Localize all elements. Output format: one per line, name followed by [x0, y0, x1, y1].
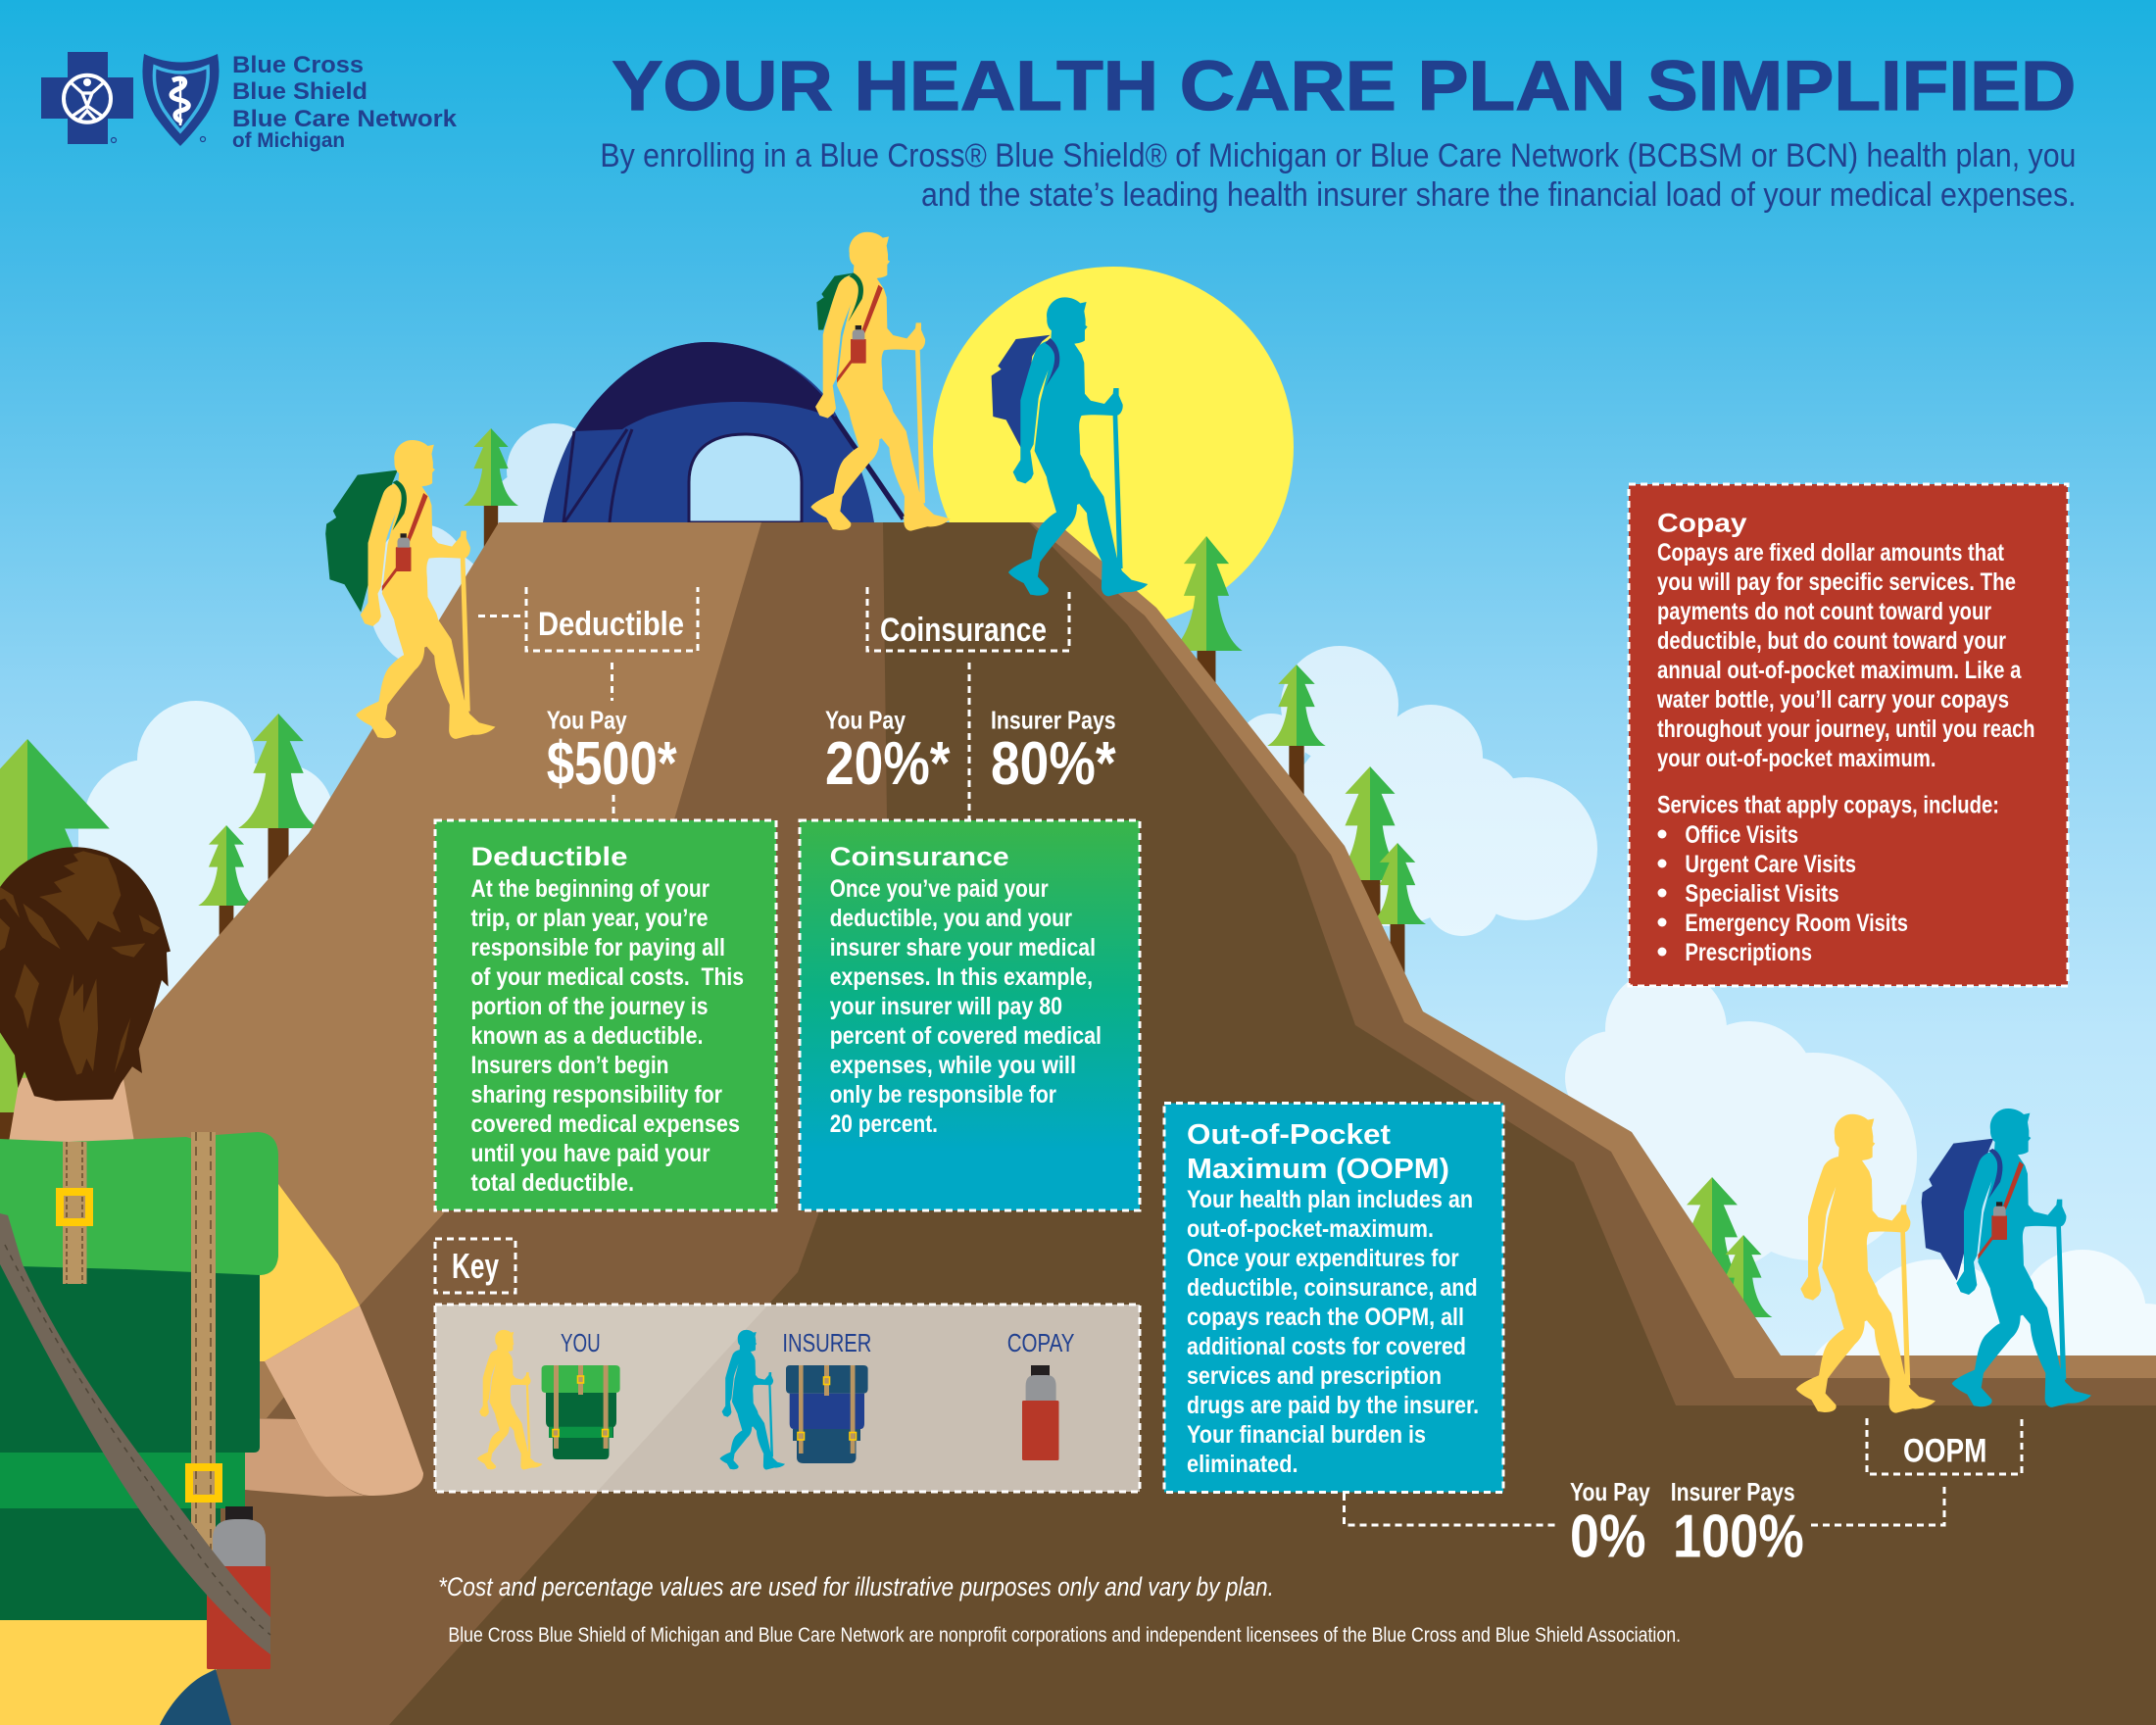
mountain: [0, 522, 2156, 1725]
text block: deductible: until you have paid your: [470, 1140, 710, 1167]
pack lower body: [0, 1508, 220, 1620]
text block: coinsurance: expenses, while you will: [830, 1052, 1076, 1079]
shoulder strap: [0, 1213, 270, 1654]
text block: coinsurance: insurer share your medical: [830, 934, 1096, 961]
coinsurance insurer pays: 80%*: [991, 730, 1116, 798]
coinsurance insurer pays: Insurer Pays: [991, 706, 1116, 735]
text block: copay: Copays are fixed dollar amounts that: [1657, 539, 2005, 567]
logo: [41, 52, 458, 152]
key: you: YOU: [561, 1328, 601, 1357]
jeans: [160, 1669, 231, 1725]
foreground hiker seen from behind: [0, 847, 423, 1725]
hiker: you, on the slope with full pack: [325, 440, 495, 739]
clouds lower right: [1565, 968, 1917, 1274]
text block: deductible: portion of the journey is: [470, 993, 708, 1020]
clouds behind the summit: [370, 423, 601, 668]
oopm insurer pays: [1671, 1477, 1804, 1571]
pack lid: [0, 1132, 278, 1275]
text block: coinsurance: only be responsible for: [830, 1081, 1056, 1109]
logo cross: [41, 52, 133, 144]
list: copay services: [1658, 821, 1908, 966]
text block: oopm: services and prescription: [1187, 1362, 1442, 1390]
pack green band: [0, 1453, 245, 1508]
hiker: you, on the summit: [810, 232, 951, 531]
heading: copay: Copay: [1657, 509, 1747, 538]
text block: oopm: Your financial burden is: [1187, 1421, 1426, 1449]
deductible label: [478, 587, 698, 819]
text block: copay: [1656, 539, 2034, 818]
key: insurer: INSURER: [782, 1328, 871, 1357]
text block: deductible: trip, or plan year, you’re: [470, 905, 709, 932]
coinsurance label: Coinsurance: [880, 612, 1047, 649]
key: copay: [1007, 1328, 1074, 1460]
text block: oopm: Once your expenditures for: [1187, 1245, 1459, 1272]
text block: coinsurance: percent of covered medical: [830, 1022, 1102, 1050]
coinsurance you pay: [825, 706, 951, 798]
key heading: Key: [452, 1246, 499, 1286]
coinsurance you pay: 20%*: [825, 730, 951, 798]
key: copay: COPAY: [1007, 1328, 1074, 1357]
text block: coinsurance: Once you’ve paid your: [830, 875, 1049, 903]
deductible label: Deductible: [538, 606, 684, 643]
list: copay services: Specialist Visits: [1685, 880, 1839, 908]
oopm you pay: You Pay: [1570, 1477, 1650, 1506]
text block: oopm: Your health plan includes an: [1187, 1186, 1473, 1213]
text block: coinsurance: deductible, you and your: [830, 905, 1072, 932]
deductible amount: $500*: [547, 730, 677, 798]
oopm you pay: [1570, 1477, 1650, 1571]
deductible amount: You Pay: [547, 706, 627, 735]
shirt hem: [0, 1620, 220, 1725]
text block: oopm: additional costs for covered: [1187, 1333, 1466, 1360]
text block: copay: payments do not count toward your: [1657, 598, 1991, 625]
text block: copay: Services that apply copays, include:: [1657, 791, 1999, 818]
list: copay services: Office Visits: [1685, 821, 1798, 849]
text block: deductible: known as a deductible.: [470, 1022, 704, 1050]
text block: coinsurance: expenses. In this example,: [830, 963, 1093, 991]
text block: deductible: responsible for paying all: [470, 934, 725, 961]
text block: oopm: copays reach the OOPM, all: [1187, 1304, 1464, 1331]
key background: [435, 1305, 1140, 1492]
heading: oopm: Out-of-Pocket: [1187, 1119, 1391, 1151]
text block: copay: water bottle, you’ll carry your copays: [1656, 686, 2009, 714]
title: YOUR HEALTH CARE PLAN SIMPLIFIED: [612, 48, 2076, 125]
neck: [9, 1073, 134, 1142]
long strap: [191, 1132, 216, 1573]
hiker: insurer, on the summit: [992, 297, 1148, 596]
sun: [933, 267, 1294, 627]
oopm label: OOPM: [1903, 1433, 1986, 1470]
key: insurer: [719, 1328, 871, 1470]
deductible amount: [547, 706, 677, 798]
pack body: [0, 1264, 260, 1453]
trees: [0, 428, 1772, 1523]
text block: copay: deductible, but do count toward your: [1657, 627, 2006, 655]
logo wordmark: Blue Care Network: [232, 106, 458, 132]
text block: deductible: [470, 875, 744, 1197]
small strap: [63, 1142, 86, 1284]
list: copay services: Emergency Room Visits: [1685, 910, 1908, 937]
text block: coinsurance: 20 percent.: [830, 1110, 938, 1138]
logo wordmark: [232, 52, 458, 152]
footnote: *Cost and percentage values are used for illustrative purposes only and vary by plan.: [438, 1572, 1274, 1602]
oopm insurer pays: 100%: [1673, 1503, 1804, 1571]
heading: oopm: Maximum (OOPM): [1187, 1154, 1449, 1185]
tent: [543, 342, 904, 522]
forearm: [245, 1418, 369, 1497]
text block: oopm: deductible, coinsurance, and: [1187, 1274, 1478, 1302]
buckle lower: [189, 1467, 219, 1499]
heading: oopm: [1187, 1119, 1449, 1185]
logo wordmark: of Michigan: [232, 129, 345, 152]
panel: out-of-pocket maximum: [1164, 1104, 1503, 1492]
heading: deductible: Deductible: [470, 842, 627, 871]
key heading: [435, 1239, 515, 1293]
text block: deductible: covered medical expenses: [470, 1110, 740, 1138]
clouds at horizon: [1803, 1250, 2156, 1455]
coinsurance insurer pays: [991, 706, 1116, 798]
text block: coinsurance: [830, 875, 1102, 1138]
panel: copay: [1629, 484, 2068, 986]
list: copay services: Prescriptions: [1685, 939, 1812, 966]
oopm insurer pays: Insurer Pays: [1671, 1477, 1795, 1506]
disclaimer: Blue Cross Blue Shield of Michigan and Blue Care Network are nonprofit corporations and independent licensees of the Blue Cross and Blue Shield Association.: [448, 1624, 1681, 1647]
text block: coinsurance: your insurer will pay 80: [830, 993, 1062, 1020]
clouds right of mountain: [1237, 646, 1597, 936]
hiker: you, at the end of the trail: [1796, 1114, 1936, 1413]
hair: [0, 847, 171, 1101]
text block: oopm: eliminated.: [1187, 1451, 1298, 1478]
panel: coinsurance: [800, 820, 1140, 1210]
text block: copay: your out-of-pocket maximum.: [1657, 745, 1936, 772]
panel: key: [435, 1239, 1140, 1492]
bottle: [207, 1506, 270, 1669]
clouds left: [78, 701, 333, 1127]
text block: copay: annual out-of-pocket maximum. Like a: [1657, 657, 2022, 684]
text block: oopm: [1187, 1186, 1479, 1478]
oopm you pay: 0%: [1570, 1503, 1646, 1571]
key: you: [477, 1328, 620, 1470]
text block: oopm: out-of-pocket-maximum.: [1187, 1215, 1434, 1243]
text block: deductible: At the beginning of your: [470, 875, 710, 903]
logo wordmark: Blue Cross: [232, 52, 364, 78]
upper arm: [265, 1306, 423, 1496]
text block: oopm: drugs are paid by the insurer.: [1187, 1392, 1479, 1419]
text block: deductible: total deductible.: [470, 1169, 634, 1197]
text block: copay: you will pay for specific services. The: [1657, 568, 2016, 596]
heading: coinsurance: Coinsurance: [830, 842, 1009, 871]
shirt sleeve: [260, 1176, 360, 1361]
text block: deductible: of your medical costs. This: [470, 963, 744, 991]
text block: copay: throughout your journey, until you reach: [1657, 715, 2034, 743]
list: copay services: Urgent Care Visits: [1685, 851, 1856, 878]
coinsurance label: [867, 587, 1069, 819]
panel: deductible: [435, 820, 776, 1210]
intro text: [600, 137, 2077, 214]
text block: deductible: Insurers don’t begin: [470, 1052, 668, 1079]
buckle upper: [60, 1192, 89, 1222]
logo shield: [142, 54, 220, 146]
coinsurance you pay: You Pay: [825, 706, 906, 735]
text block: deductible: sharing responsibility for: [470, 1081, 722, 1109]
oopm label: [1345, 1418, 2022, 1525]
hiker: insurer, at the end of the trail: [1922, 1109, 2091, 1407]
logo wordmark: Blue Shield: [232, 78, 368, 105]
